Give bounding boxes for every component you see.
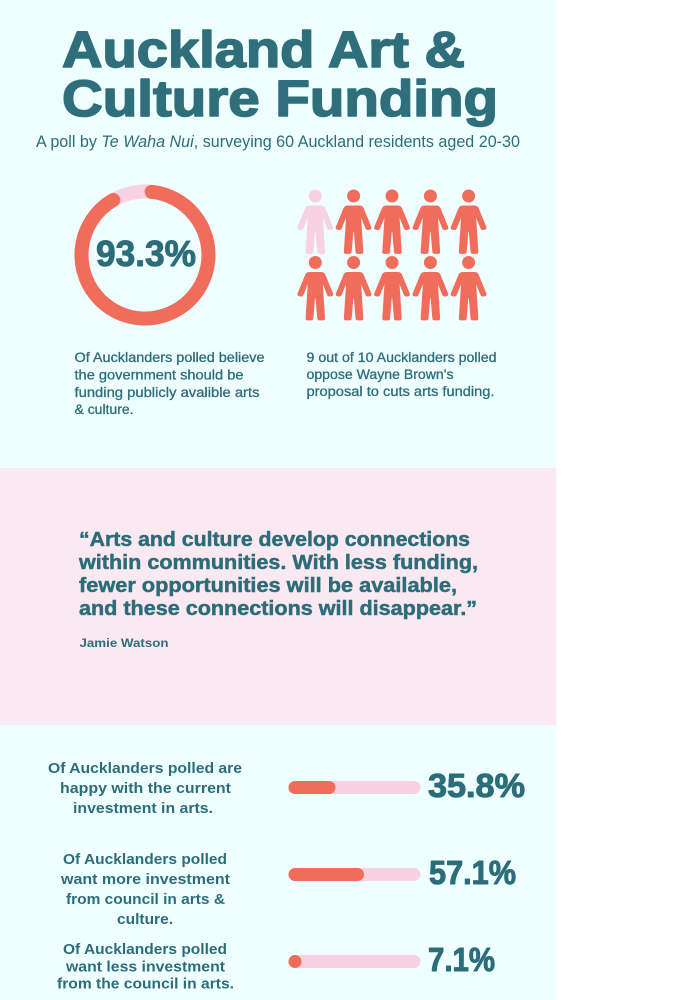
label: investment in arts.: [73, 801, 213, 817]
value: 35.8%: [428, 767, 525, 804]
donut chart: 93.3%: [75, 185, 215, 325]
label: from the council in arts.: [57, 976, 234, 992]
quote text: within communities. With less funding,: [78, 552, 478, 574]
value: 7.1%: [428, 941, 495, 978]
pictogram: 9 of 10 people: [298, 190, 486, 320]
label: from council in arts &: [66, 892, 226, 908]
value: 57.1%: [429, 854, 516, 891]
title: Culture Funding: [62, 70, 498, 127]
label: [48, 761, 242, 817]
text: oppose proposal stat: 9 out of 10 Aucklanders polled: [306, 350, 496, 365]
donut chart: 93.3%: 93.3%: [96, 233, 196, 274]
quote text: fewer opportunities will be available,: [79, 575, 457, 597]
row: want more investment: [60, 852, 516, 928]
panel: quote: [0, 468, 556, 725]
title: Auckland Art &: [62, 21, 465, 78]
progress bar: [288, 868, 420, 881]
text: government funding stat: & culture.: [74, 402, 134, 417]
header: [36, 21, 520, 151]
label: want less investment: [65, 960, 225, 976]
quote text: [78, 529, 478, 620]
label: Of Aucklanders polled: [63, 942, 227, 958]
quote text: and these connections will disappear.”: [79, 598, 477, 620]
label: [60, 852, 230, 928]
text: oppose proposal stat: [306, 350, 496, 399]
progress bar: [288, 955, 420, 968]
label: Of Aucklanders polled: [63, 852, 227, 868]
label: Of Aucklanders polled are: [48, 761, 242, 777]
row: happy with current investment: [48, 761, 525, 817]
label: [57, 942, 234, 992]
row: want less investment: [57, 941, 495, 992]
label: want more investment: [60, 872, 230, 888]
quote text: “Arts and culture develop connections: [79, 529, 470, 551]
label: happy with the current: [60, 781, 231, 797]
text: oppose proposal stat: oppose Wayne Brown's: [306, 367, 454, 382]
text: government funding stat: funding publicly avalible arts: [74, 385, 260, 400]
title: [62, 21, 498, 127]
text: government funding stat: [74, 350, 264, 417]
subtitle: A poll by Te Waha Nui, surveying 60 Auckland residents aged 20-30: [36, 133, 520, 151]
label: culture.: [117, 912, 173, 928]
text: oppose proposal stat: proposal to cuts arts funding.: [306, 384, 494, 399]
text: government funding stat: the government should be: [74, 368, 244, 382]
progress bar: [288, 781, 420, 794]
text: government funding stat: Of Aucklanders polled believe: [74, 350, 264, 365]
quote attribution: Jamie Watson: [80, 636, 168, 650]
